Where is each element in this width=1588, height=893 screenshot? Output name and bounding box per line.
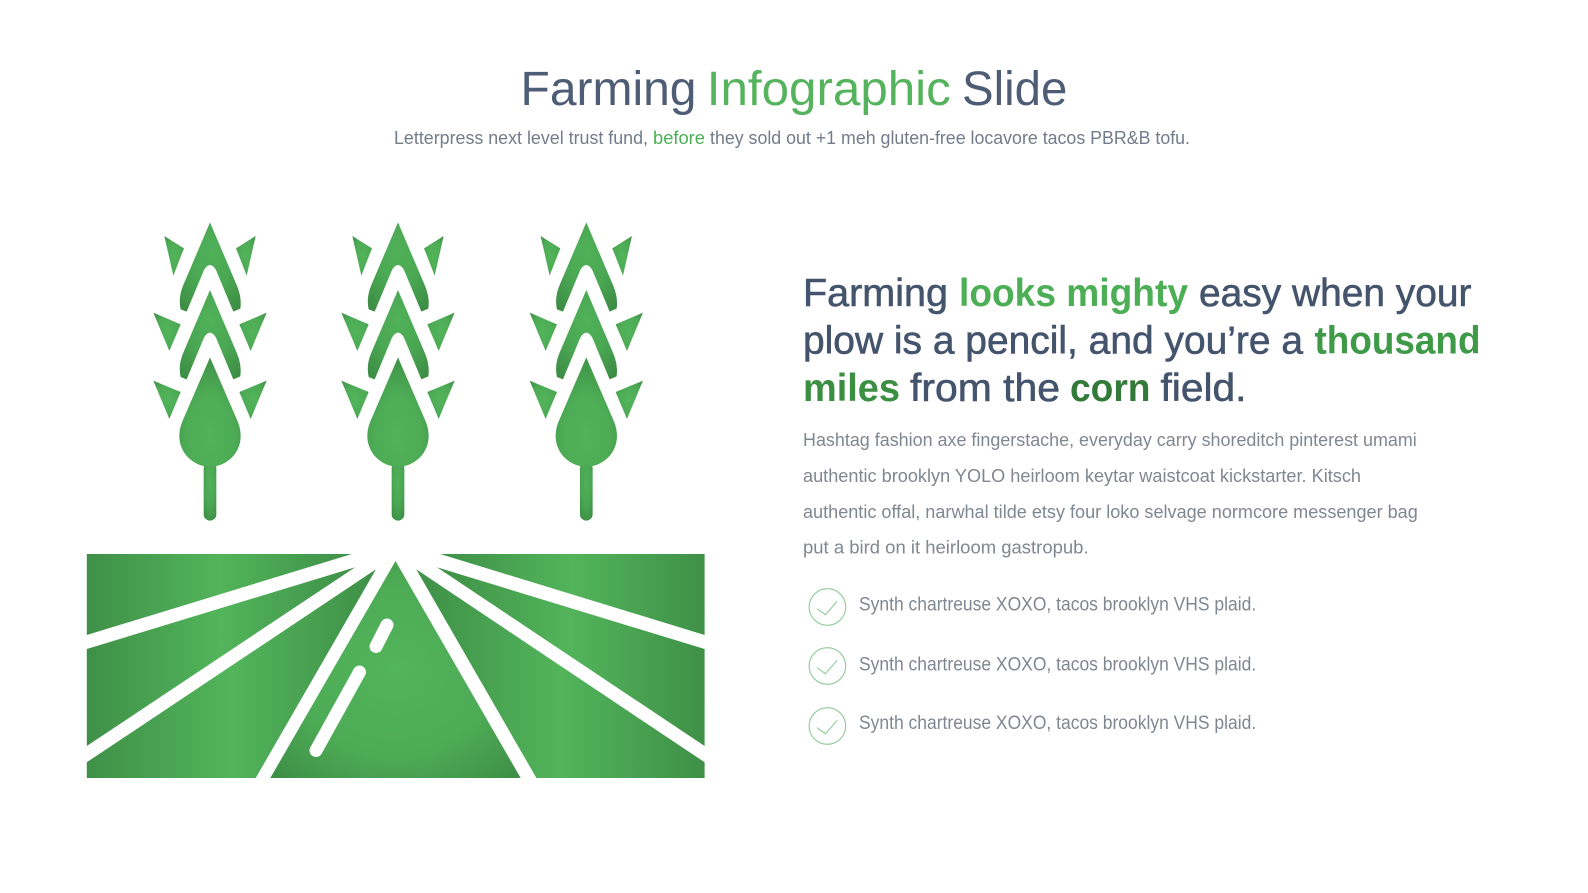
body paragraph: authentic brooklyn YOLO heirloom keytar waistcoat kickstarter. Kitsch — [803, 465, 1361, 486]
checklist item 1 — [809, 589, 1256, 625]
heading: miles — [803, 367, 900, 410]
subtitle: they sold out +1 meh gluten-free locavore tacos PBR&B tofu. — [710, 127, 1190, 148]
icon: field with road — [87, 554, 705, 778]
subtitle: before — [653, 127, 705, 148]
body paragraph: Hashtag fashion axe fingerstache, everyday carry shoreditch pinterest umami — [803, 429, 1417, 450]
heading: plow is a pencil, and you’re a — [803, 320, 1303, 362]
heading: easy when your — [1199, 272, 1472, 315]
checklist item 2 — [809, 648, 1256, 684]
icon: wheat stalk 2 — [341, 222, 455, 521]
checklist item 3 — [809, 708, 1256, 744]
checklist item 3: Synth chartreuse XOXO, tacos brooklyn VHS plaid. — [859, 713, 1256, 734]
checklist item 1: Synth chartreuse XOXO, tacos brooklyn VHS plaid. — [859, 595, 1256, 616]
icon: wheat stalk 3 — [530, 222, 643, 521]
subtitle: Letterpress next level trust fund, — [394, 127, 648, 148]
body paragraph: put a bird on it heirloom gastropub. — [803, 536, 1089, 558]
body paragraph — [803, 429, 1418, 558]
title: Farming — [520, 63, 696, 116]
icon: wheat stalk 1 — [153, 222, 267, 521]
subtitle — [394, 127, 1190, 148]
title: Slide — [962, 63, 1067, 116]
title — [520, 63, 1067, 116]
heading: thousand — [1314, 320, 1480, 362]
heading: looks mighty — [959, 272, 1188, 315]
heading: from the — [910, 367, 1060, 410]
checklist item 2: Synth chartreuse XOXO, tacos brooklyn VHS plaid. — [859, 654, 1256, 675]
heading — [803, 272, 1480, 410]
body paragraph: authentic offal, narwhal tilde etsy four loko selvage normcore messenger bag — [803, 501, 1418, 522]
heading: corn — [1070, 367, 1150, 410]
title: Infographic — [707, 63, 951, 116]
heading: field. — [1160, 367, 1246, 410]
heading: Farming — [803, 272, 948, 315]
